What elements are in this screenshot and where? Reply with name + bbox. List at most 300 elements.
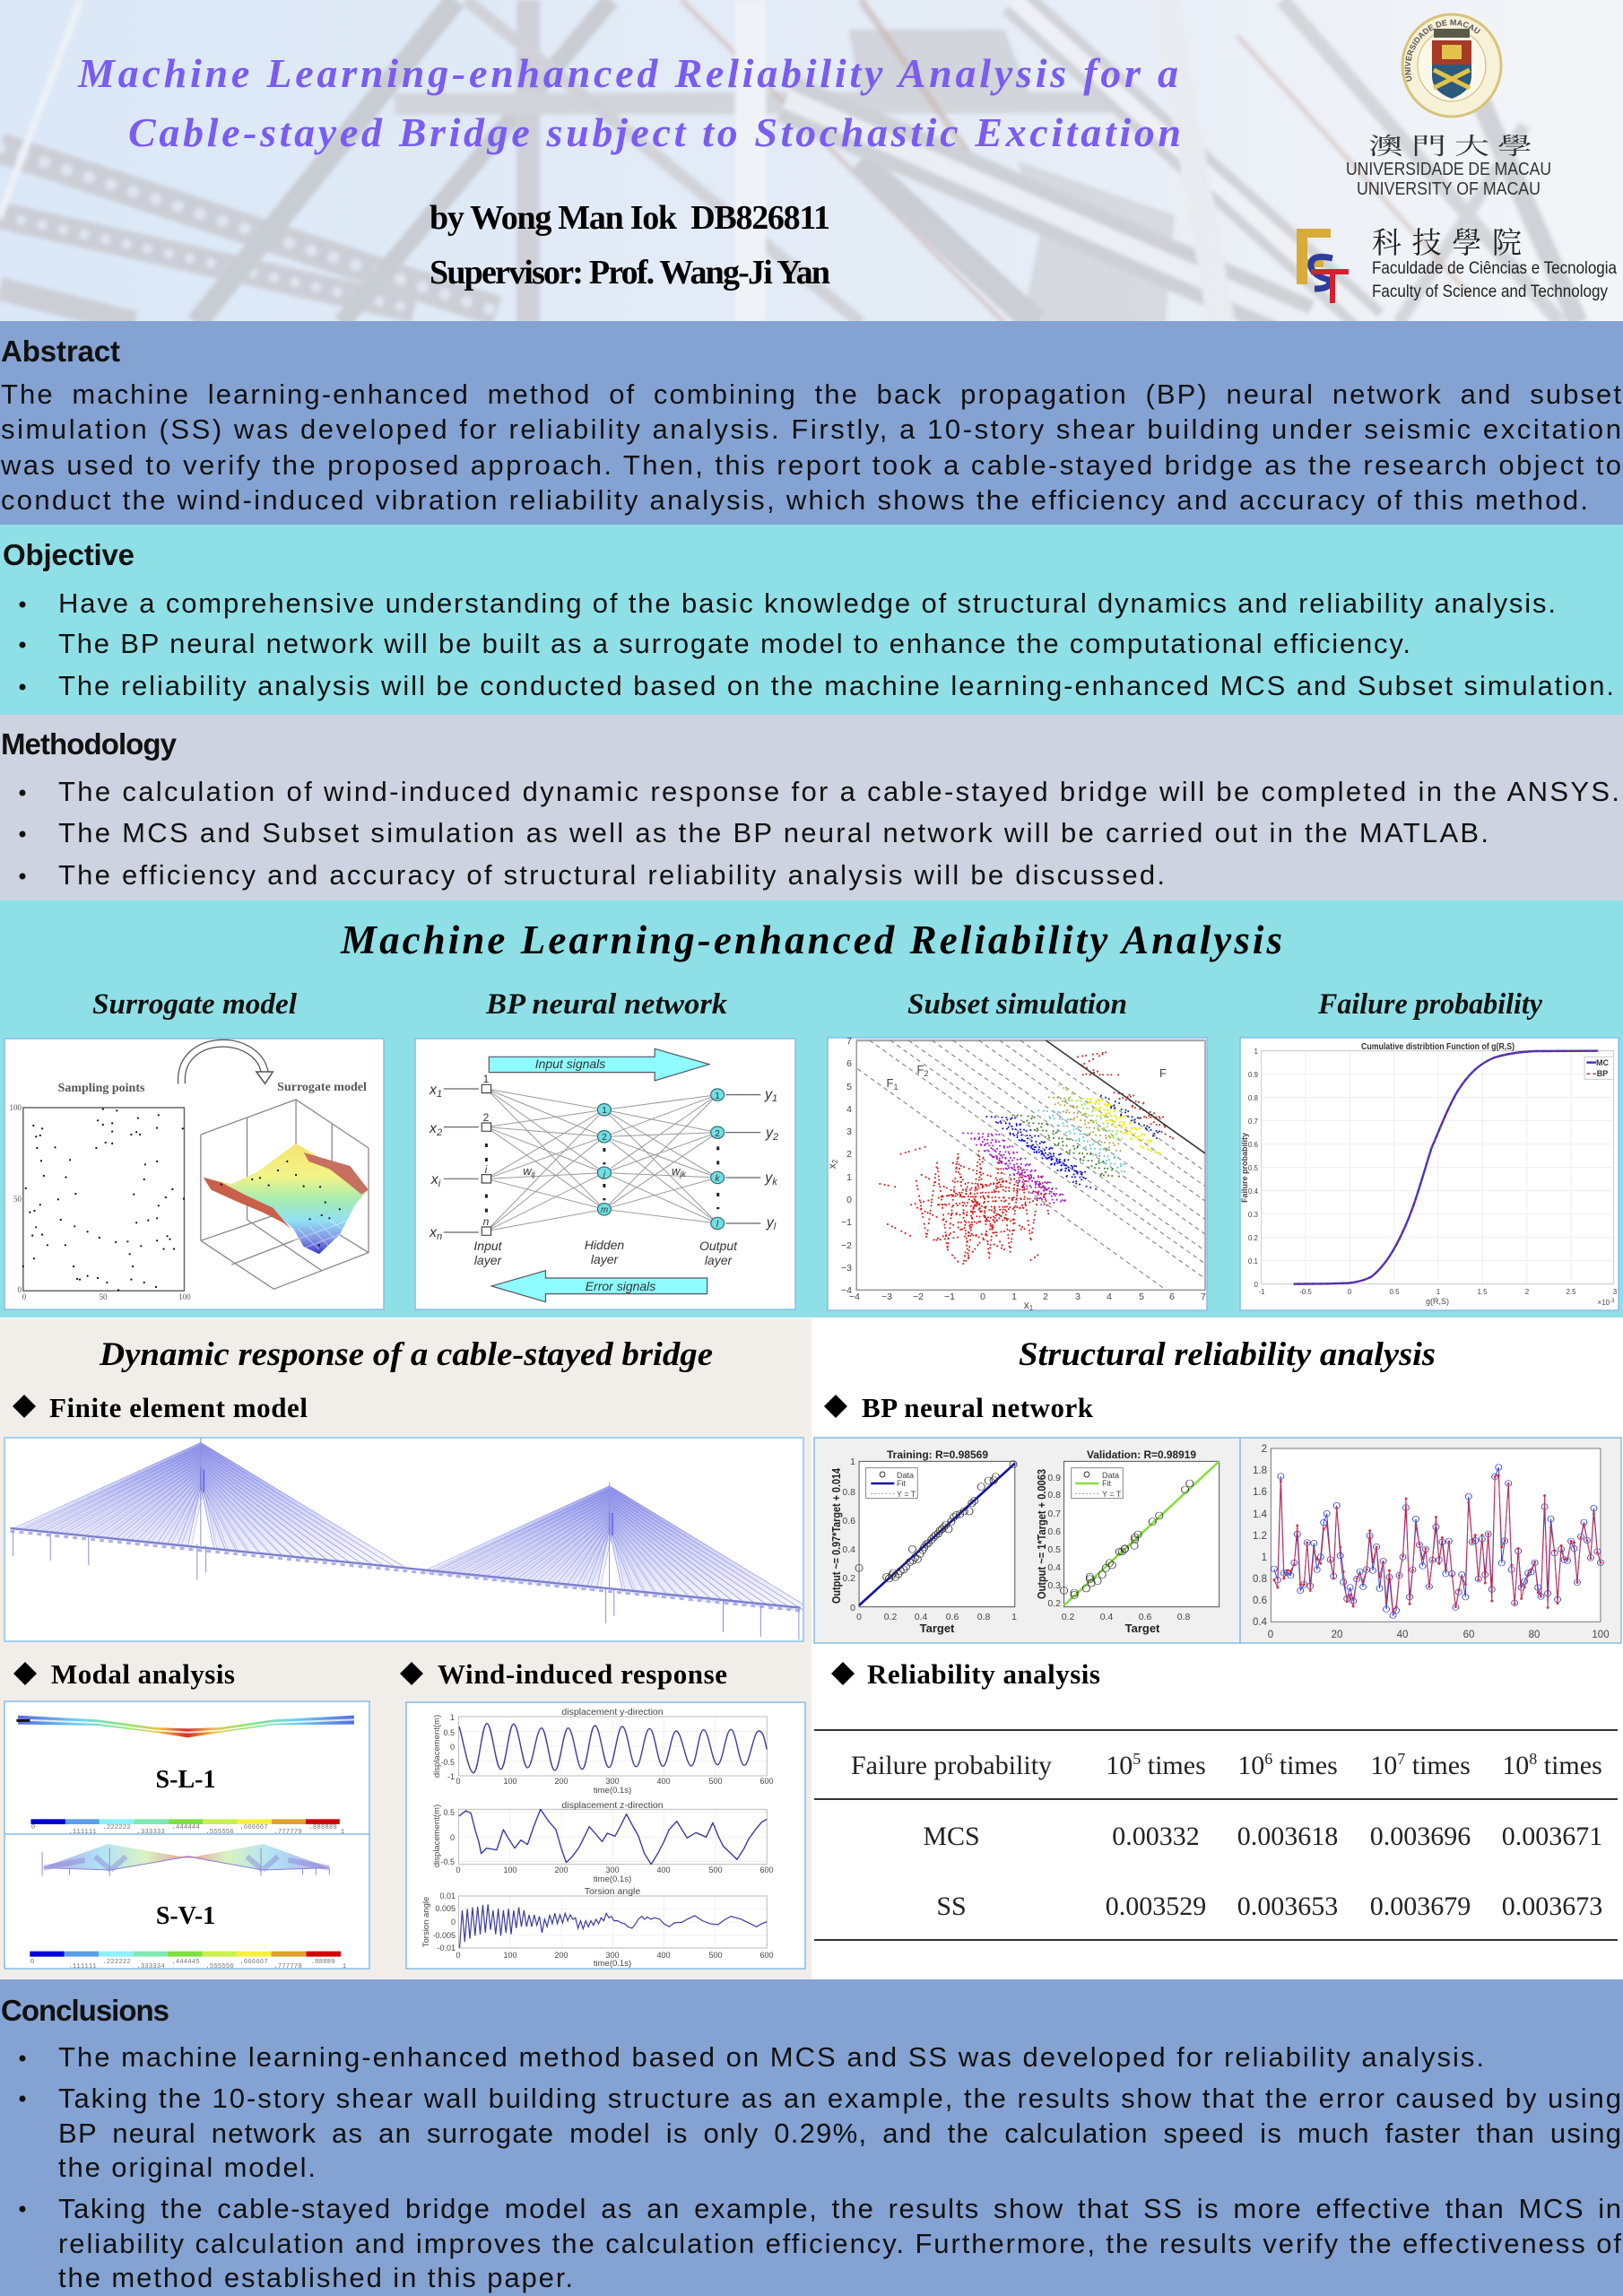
chart: failure probability CDF: Cumulative distribtion Function of g(R,S) <box>1361 1042 1515 1052</box>
chart: subset simulation scatter: F <box>1159 1066 1167 1080</box>
chart: BP regression and prediction plots: 0 <box>856 1612 862 1622</box>
university name <box>1346 134 1551 199</box>
chart: failure probability CDF: 0.3 <box>1248 1211 1259 1219</box>
chart: subset simulation scatter: 1 <box>846 1172 852 1183</box>
chart: BP regression and prediction plots: 0.2 <box>1062 1612 1074 1622</box>
chart: surrogate model illustration: 100 <box>178 1292 191 1301</box>
panel: methodology <box>0 715 1623 900</box>
chart: BP regression and prediction plots: Validation: R=0.98919 <box>1087 1448 1196 1461</box>
chart: BP regression and prediction plots: 1 <box>1262 1552 1267 1563</box>
sub-heading: BP neural network: BP neural network <box>485 988 728 1021</box>
chart: wind-induced response time histories: -0.5 <box>440 1758 455 1767</box>
chart: BP regression and prediction plots: 0 <box>1268 1630 1273 1640</box>
chart: failure probability CDF <box>1240 1038 1619 1310</box>
chart: wind-induced response time histories: 0 <box>450 1743 455 1752</box>
chart: BP neural network diagram: ij <box>532 1170 536 1178</box>
chart: subset simulation scatter: 2 <box>846 1149 852 1160</box>
chart: BP regression and prediction plots: Fit <box>1102 1479 1111 1488</box>
header background: steel structure photo <box>0 0 1623 323</box>
plot: training regression <box>859 1461 1015 1607</box>
legend <box>1584 1057 1614 1079</box>
chart: modal analysis mode shapes: .222222 <box>102 1824 131 1831</box>
chart: wind-induced response time histories: -0.01 <box>437 1944 456 1952</box>
chart: failure probability CDF: 0.8 <box>1248 1094 1259 1102</box>
mode shape S-L-1 <box>18 1716 354 1737</box>
mode shape S-V-1 <box>44 1844 329 1870</box>
chart: failure probability CDF: 2 <box>1525 1288 1530 1296</box>
chart: BP neural network diagram: 2 <box>436 1127 442 1138</box>
chart: BP regression and prediction plots: 2 <box>1262 1444 1267 1455</box>
chart: wind-induced response time histories: Torsion angle <box>585 1886 640 1897</box>
chart: failure probability CDF: 1 <box>1436 1288 1441 1296</box>
chart: surrogate model illustration: 0 <box>18 1285 22 1294</box>
table: failure probability results: 0.003529 <box>1106 1892 1206 1921</box>
chart: modal analysis mode shapes: .777779 <box>273 1963 302 1970</box>
chart: BP regression and prediction plots: 0.2 <box>842 1573 855 1584</box>
sub-heading: reliability analysis: Reliability analysis <box>867 1658 1100 1690</box>
author and supervisor: by Wong Man Iok DB826811 <box>430 199 830 237</box>
panel: structural reliability analysis <box>812 1318 1623 1979</box>
chart: BP neural network diagram: 1 <box>715 1091 720 1101</box>
colour bar S-V-1 <box>30 1952 341 1957</box>
table: failure probability results: 10 <box>1106 1751 1133 1780</box>
table: failure probability results: 7 <box>1397 1750 1405 1768</box>
chart: wind-induced response time histories: 400 <box>656 1866 671 1874</box>
chart: BP neural network diagram: n <box>483 1215 490 1228</box>
chart: wind-induced response time histories: 0.5 <box>443 1728 455 1737</box>
chart: wind-induced response time histories: 100 <box>503 1777 517 1786</box>
chart: wind-induced response time histories: -1 <box>447 1772 455 1781</box>
chart: failure probability CDF: 0.7 <box>1248 1118 1259 1126</box>
table: failure probability results: 5 <box>1133 1750 1141 1768</box>
chart: wind-induced response time histories: 300 <box>605 1777 620 1786</box>
table: failure probability results: Failure probability <box>851 1751 1052 1780</box>
chart: BP neural network diagram: Hidden <box>585 1238 624 1252</box>
table: failure probability results: 10 <box>1502 1751 1529 1780</box>
chart: BP neural network diagram: layer <box>474 1253 503 1267</box>
chart: BP regression and prediction plots: 0.3 <box>1047 1580 1061 1591</box>
chart: modal analysis mode shapes: S-L-1 <box>156 1766 215 1794</box>
chart: subset simulation scatter: 6 <box>846 1058 852 1069</box>
chart: BP neural network diagram: layer <box>591 1252 620 1266</box>
chart: subset simulation scatter: x <box>1024 1299 1029 1311</box>
legend <box>1072 1468 1123 1499</box>
objective bullets: Have a comprehensive understanding of the basic knowledge of structural dynamics and reliability analysis. <box>58 587 1556 619</box>
chart: wind-induced response time histories: 300 <box>605 1951 620 1960</box>
chart: BP neural network diagram: k <box>716 1174 721 1184</box>
chart: surrogate model illustration: 0 <box>22 1292 27 1301</box>
chart: BP regression and prediction plots: Data <box>897 1471 914 1480</box>
chart: BP neural network diagram: j <box>602 1170 606 1179</box>
table: failure probability results: 0.003696 <box>1370 1822 1471 1851</box>
panel: abstract <box>0 321 1623 525</box>
arrow: input signals <box>489 1048 709 1081</box>
table: failure probability results: times <box>1141 1751 1206 1780</box>
title: Cable-stayed Bridge subject to Stochastic Excitation <box>128 109 1181 155</box>
objective bullets: The BP neural network will be built as a surrogate model to enhance the computational efficiency. <box>58 628 1410 659</box>
chart: subset simulation scatter <box>826 1036 1207 1312</box>
chart: modal analysis mode shapes: 0 <box>30 1959 35 1966</box>
chart: subset simulation scatter: 7 <box>1201 1292 1206 1302</box>
chart: wind-induced response time histories: 600 <box>759 1951 774 1960</box>
table: failure probability results: 0.003679 <box>1370 1892 1471 1921</box>
table: failure probability results: 8 <box>1529 1750 1537 1768</box>
chart: BP neural network diagram: 1 <box>483 1073 490 1085</box>
chart: wind-induced response time histories: displacement(m) <box>432 1715 442 1778</box>
chart: failure probability CDF: 0 <box>1348 1288 1352 1296</box>
chart: BP neural network diagram: Error signals <box>586 1279 655 1293</box>
chart: subset simulation scatter: 2 <box>924 1069 928 1078</box>
chart: bridge finite element model <box>4 1438 819 1641</box>
conclusions bullets: The machine learning-enhanced method based on MCS and SS was developed for reliability analysis. <box>58 2041 1484 2073</box>
chart: modal analysis mode shapes: .444445 <box>171 1959 200 1966</box>
table: failure probability results: 0.003671 <box>1502 1822 1602 1851</box>
chart: BP regression and prediction plots: Target <box>1125 1622 1160 1635</box>
chart: BP regression and prediction plots: 1 <box>850 1457 855 1467</box>
chart: BP regression and prediction plots: 80 <box>1529 1630 1540 1640</box>
chart: modal analysis mode shapes: .555556 <box>205 1829 234 1836</box>
sub-heading: failure probability: Failure probability <box>1317 988 1542 1021</box>
chart: BP neural network diagram: y <box>766 1126 773 1141</box>
chart: BP regression and prediction plots: 0.7 <box>1047 1509 1061 1519</box>
chart: BP regression and prediction plots: 0.4 <box>1253 1617 1268 1628</box>
chart: wind-induced response time histories: displacement(m) <box>432 1805 442 1867</box>
methodology bullets <box>20 776 1619 891</box>
university name: 澳 門 大 學 <box>1368 134 1532 160</box>
heading: abstract: Abstract <box>1 335 120 368</box>
chart: wind-induced response time histories: 200 <box>554 1866 568 1874</box>
sub-heading: BP neural network: BP neural network <box>862 1392 1094 1423</box>
chart: BP regression and prediction plots: 0.2 <box>1047 1598 1061 1609</box>
chart: BP regression and prediction plots: Output ~= 1*Target + 0.0063 <box>1035 1469 1048 1599</box>
table: failure probability results: 0.003618 <box>1237 1822 1338 1851</box>
chart: wind-induced response time histories: 600 <box>759 1777 774 1786</box>
methodology bullets: The calculation of wind-induced dynamic response for a cable-stayed bridge will be completed in the ANSYS. <box>58 776 1619 807</box>
panel: conclusions <box>0 1979 1623 2296</box>
chart: wind-induced response time histories <box>406 1702 805 1969</box>
chart: BP regression and prediction plots: 1.4 <box>1253 1509 1268 1520</box>
chart: surrogate model illustration <box>4 1039 384 1309</box>
sub-heading: wind-induced response: Wind-induced response <box>438 1658 727 1690</box>
chart: BP neural network diagram: i <box>438 1178 441 1189</box>
chart: BP regression and prediction plots: 0.8 <box>1047 1490 1061 1500</box>
chart: wind-induced response time histories: 0.5 <box>443 1808 455 1817</box>
chart: subset simulation scatter: 5 <box>846 1082 852 1092</box>
chart: modal analysis mode shapes: .666667 <box>239 1959 268 1966</box>
chart: subset simulation scatter: 1 <box>1029 1304 1034 1312</box>
chart: failure probability CDF: 1.5 <box>1477 1288 1488 1296</box>
header banner <box>0 0 1623 321</box>
chart: subset simulation scatter: 3 <box>846 1126 852 1137</box>
chart: BP neural network diagram: w <box>672 1164 680 1178</box>
chart: BP regression and prediction plots: 0.6 <box>842 1516 855 1526</box>
chart: BP neural network diagram: l <box>716 1220 719 1230</box>
chart: subset simulation scatter: 0 <box>980 1292 985 1302</box>
table: failure probability results: SS <box>936 1892 967 1921</box>
chart: wind-induced response time histories: time(0.1s) <box>594 1874 631 1884</box>
title: Machine Learning-enhanced Reliability Analysis for a <box>77 50 1178 96</box>
chart: wind-induced response time histories: 0 <box>456 1777 461 1786</box>
conclusions bullets: reliability calculation and improves the calculation efficiency. Furthermore, the results verify the effectiveness of <box>58 2228 1621 2259</box>
chart: subset simulation scatter: −3 <box>881 1292 892 1302</box>
chart: BP regression and prediction plots: 0.9 <box>1047 1473 1061 1483</box>
conclusions bullets: BP neural network as an surrogate model is only 0.29%, and the calculation speed is much faster than using <box>58 2118 1621 2149</box>
chart: wind-induced response time histories: displacement y-direction <box>561 1707 664 1718</box>
table: failure probability results: 0.003673 <box>1502 1892 1602 1921</box>
chart: failure probability CDF: 1 <box>1254 1048 1259 1056</box>
chart: BP neural network diagram: x <box>431 1172 438 1187</box>
chart: failure probability CDF: 0 <box>1254 1281 1259 1289</box>
chart: wind-induced response time histories: 300 <box>605 1866 620 1874</box>
chart: BP regression and prediction plots: 0.6 <box>1047 1526 1061 1537</box>
chart: wind-induced response time histories: -0.5 <box>440 1857 455 1866</box>
chart: wind-induced response time histories: 0 <box>450 1833 455 1842</box>
chart: BP regression and prediction plots: 60 <box>1463 1630 1474 1640</box>
chart: wind-induced response time histories: 0 <box>451 1918 456 1926</box>
chart: BP neural network diagram: 1 <box>602 1106 607 1116</box>
chart: BP regression and prediction plots: 0.8 <box>1253 1574 1267 1585</box>
section heading: Machine Learning-enhanced Reliability Analysis <box>340 918 1282 962</box>
chart: failure probability CDF: 0.9 <box>1248 1071 1259 1079</box>
chart: BP neural network diagram: n <box>437 1231 442 1242</box>
chart: BP neural network diagram: 2 <box>715 1129 720 1139</box>
abstract text: simulation (SS) was developed for reliability analysis. Firstly, a 10-story shear building under seismic excitation <box>1 413 1621 445</box>
chart: subset simulation scatter: x <box>826 1163 838 1169</box>
chart: BP regression and prediction plots <box>814 1438 1621 1643</box>
chart: wind-induced response time histories: 100 <box>503 1951 517 1960</box>
chart: modal analysis mode shapes: .88889 <box>310 1959 335 1966</box>
title <box>77 50 1181 155</box>
chart: wind-induced response time histories: 1 <box>450 1713 455 1722</box>
author and supervisor <box>430 199 830 291</box>
table: failure probability results: times <box>1272 1751 1338 1780</box>
chart: BP neural network diagram: y <box>765 1170 772 1186</box>
chart: wind-induced response time histories: 500 <box>708 1951 723 1960</box>
chart: BP regression and prediction plots: 0.4 <box>1047 1562 1061 1573</box>
chart: BP regression and prediction plots: 0.2 <box>884 1612 897 1622</box>
chart: surrogate model illustration: 50 <box>13 1195 22 1204</box>
chart: BP neural network diagram: 2 <box>483 1111 490 1124</box>
chart: BP regression and prediction plots: 0.4 <box>915 1612 927 1622</box>
chart: subset simulation scatter: 5 <box>1139 1292 1144 1302</box>
abstract text: The machine learning-enhanced method of combining the back propagation (BP) neural network and subset <box>1 378 1621 410</box>
icon: university seal: UNIVERSIDADE DE MACAU <box>1404 20 1480 82</box>
chart: subset simulation scatter: 4 <box>1107 1292 1112 1302</box>
chart: modal analysis mode shapes: .333334 <box>136 1963 165 1970</box>
chart: failure probability CDF: 0.2 <box>1248 1234 1259 1242</box>
chart: BP regression and prediction plots: 1 <box>1011 1612 1017 1622</box>
colour bar S-L-1 <box>30 1819 340 1824</box>
chart: wind-induced response time histories: displacement z-direction <box>561 1800 664 1811</box>
chart: modal analysis mode shapes: .444444 <box>171 1824 200 1831</box>
chart: BP regression and prediction plots: Target <box>920 1622 955 1635</box>
sub-heading: modal analysis: Modal analysis <box>51 1658 235 1690</box>
chart: wind-induced response time histories: 500 <box>708 1866 723 1874</box>
chart: BP regression and prediction plots: 0.5 <box>1047 1544 1061 1555</box>
conclusions bullets: Taking the 10-story shear wall building structure as an example, the results show that the error caused by using <box>58 2083 1621 2114</box>
chart: BP neural network diagram: x <box>430 1121 437 1136</box>
methodology bullets: The efficiency and accuracy of structural reliability analysis will be discussed. <box>58 859 1165 891</box>
chart: BP neural network diagram <box>415 1039 795 1309</box>
chart: BP regression and prediction plots: 0.8 <box>977 1612 990 1622</box>
chart: modal analysis mode shapes: .888889 <box>308 1824 337 1831</box>
chart: subset simulation scatter: 2 <box>1043 1292 1048 1302</box>
chart: failure probability CDF: 0.6 <box>1248 1141 1259 1149</box>
chart: surrogate model illustration: Surrogate model <box>277 1081 367 1094</box>
chart: modal analysis mode shapes: 1 <box>343 1963 347 1970</box>
chart: subset simulation scatter: 1 <box>893 1083 898 1091</box>
chart: subset simulation scatter: 1 <box>1011 1292 1017 1302</box>
chart: BP neural network diagram: y <box>767 1215 774 1231</box>
heading: conclusions: Conclusions <box>1 1994 169 2027</box>
chart: subset simulation scatter: 4 <box>846 1104 852 1115</box>
chart: BP neural network diagram: i <box>485 1163 488 1176</box>
chart: BP neural network diagram: 1 <box>437 1089 442 1100</box>
chart: subset simulation scatter: 3 <box>1075 1292 1081 1302</box>
table: failure probability results: 0.003653 <box>1237 1892 1338 1921</box>
icon: university seal <box>1401 13 1503 118</box>
chart: wind-induced response time histories: 200 <box>554 1777 568 1786</box>
chart: failure probability CDF: 0.4 <box>1248 1187 1259 1196</box>
chart: BP regression and prediction plots: 0.8 <box>842 1487 855 1498</box>
chart: BP regression and prediction plots: Fit <box>897 1479 906 1488</box>
chart: BP neural network diagram: 2 <box>772 1132 778 1143</box>
table: failure probability results: 10 <box>1237 1751 1264 1780</box>
chart: BP neural network diagram: jk <box>679 1170 686 1178</box>
chart: subset simulation scatter: F <box>917 1063 924 1076</box>
heading: dynamic response: Dynamic response of a cable-stayed bridge <box>99 1336 713 1373</box>
conclusions bullets: the original model. <box>58 2152 316 2183</box>
chart: wind-induced response time histories: 200 <box>554 1951 568 1960</box>
table: failure probability results: 6 <box>1264 1750 1272 1768</box>
chart: modal analysis mode shapes: S-V-1 <box>156 1902 215 1930</box>
chart: modal analysis mode shapes: .111111 <box>68 1963 97 1970</box>
arrow: error signals <box>491 1271 707 1302</box>
chart: BP neural network diagram: y <box>765 1087 772 1102</box>
sub-heading: finite element model: Finite element model <box>49 1392 308 1423</box>
methodology bullets: The MCS and Subset simulation as well as the BP neural network will be carried out in the MATLAB. <box>58 817 1488 848</box>
abstract text: was used to verify the proposed approach. Then, this report took a cable-stayed bridge as the research object to <box>0 449 1621 481</box>
chart: modal analysis mode shapes <box>4 1701 369 1970</box>
chart: failure probability CDF: 2.5 <box>1566 1288 1576 1296</box>
chart: BP regression and prediction plots: Y = T <box>897 1490 916 1499</box>
chart: BP regression and prediction plots: 0.6 <box>946 1612 959 1622</box>
chart: BP regression and prediction plots: 0 <box>850 1603 855 1613</box>
chart: wind-induced response time histories: 0 <box>456 1951 461 1960</box>
chart: failure probability CDF: Failure probability <box>1240 1133 1249 1203</box>
university name: UNIVERSITY OF MACAU <box>1357 179 1541 199</box>
chart: failure probability CDF: 0.5 <box>1248 1164 1259 1172</box>
heading: objective: Objective <box>3 538 135 571</box>
chart: BP regression and prediction plots: 0.6 <box>1253 1596 1267 1606</box>
abstract text: conduct the wind-induced vibration reliability analysis, which shows the efficiency and accuracy of this method. <box>1 484 1588 516</box>
chart: BP regression and prediction plots: Training: R=0.98569 <box>887 1448 988 1461</box>
chart: BP regression and prediction plots: 0.6 <box>1139 1612 1151 1622</box>
chart: BP neural network diagram: x <box>430 1225 437 1240</box>
chart: BP regression and prediction plots: 0.4 <box>1100 1612 1113 1622</box>
chart: wind-induced response time histories: Torsion angle <box>421 1897 431 1947</box>
conclusions bullets: Taking the cable-stayed bridge model as an example, the results show that SS is more effective than MCS in <box>58 2193 1621 2224</box>
chart: BP regression and prediction plots: 20 <box>1332 1630 1342 1640</box>
chart: BP regression and prediction plots: 1.8 <box>1253 1465 1267 1476</box>
icon: FST logo <box>1297 229 1349 303</box>
chart: failure probability CDF: g(R,S) <box>1426 1297 1449 1306</box>
legend <box>866 1468 917 1499</box>
chart: subset simulation scatter: −1 <box>841 1217 852 1228</box>
chart: modal analysis mode shapes: .111111 <box>68 1829 97 1836</box>
chart: wind-induced response time histories: 400 <box>656 1777 671 1786</box>
chart: BP neural network diagram: m <box>601 1205 608 1215</box>
panel: dynamic response of a cable-stayed bridge <box>0 1318 819 1979</box>
chart: wind-induced response time histories: 0.01 <box>439 1892 456 1900</box>
university name: UNIVERSIDADE DE MACAU <box>1346 160 1551 179</box>
chart: failure probability CDF: -0.5 <box>1299 1288 1312 1296</box>
chart: subset simulation scatter: F <box>887 1076 893 1090</box>
faculty name: 科技學院 <box>1372 227 1522 260</box>
faculty name <box>1372 227 1617 301</box>
author and supervisor: Supervisor: Prof. Wang-Ji Yan <box>430 254 830 291</box>
chart: BP regression and prediction plots: Data <box>1102 1471 1119 1480</box>
chart: wind-induced response time histories: time(0.1s) <box>594 1959 631 1969</box>
chart: modal analysis mode shapes: .222222 <box>102 1959 131 1966</box>
conclusions bullets <box>20 2041 1621 2293</box>
sub-heading: subset simulation: Subset simulation <box>907 988 1127 1021</box>
chart: BP neural network diagram: k <box>772 1177 777 1187</box>
chart: surrogate model illustration: Sampling points <box>58 1082 145 1095</box>
heading: structural reliability analysis: Structural reliability analysis <box>1019 1336 1436 1373</box>
chart: BP regression and prediction plots: 1.6 <box>1253 1487 1267 1498</box>
chart: wind-induced response time histories: -0.005 <box>432 1931 456 1940</box>
chart: modal analysis mode shapes: .333333 <box>136 1829 165 1836</box>
chart: BP neural network diagram: Input <box>473 1239 503 1253</box>
chart: wind-induced response time histories: time(0.1s) <box>594 1786 631 1796</box>
chart: BP regression and prediction plots: 0.4 <box>842 1544 855 1555</box>
plot: validation regression <box>1064 1461 1219 1607</box>
chart: subset simulation scatter: 6 <box>1169 1292 1175 1302</box>
chart: BP regression and prediction plots: Output ~= 0.97*Target + 0.014 <box>829 1467 843 1604</box>
chart: BP neural network diagram: Input signals <box>535 1057 605 1071</box>
chart: subset simulation scatter: −2 <box>841 1240 852 1251</box>
chart: subset simulation scatter: −3 <box>841 1263 852 1274</box>
chart: surrogate model illustration: 50 <box>99 1292 108 1301</box>
chart: BP neural network diagram: 2 <box>602 1133 607 1143</box>
chart: subset simulation scatter: 0 <box>846 1195 852 1205</box>
plot: prediction time series <box>1271 1448 1601 1622</box>
chart: BP neural network diagram: w <box>523 1164 532 1178</box>
panel: machine learning-enhanced reliability analysis <box>0 900 1623 1318</box>
heading: methodology: Methodology <box>1 727 178 761</box>
chart: wind-induced response time histories: 0 <box>456 1866 461 1874</box>
chart: failure probability CDF: -1 <box>1258 1288 1265 1296</box>
chart: BP regression and prediction plots: 0.8 <box>1177 1612 1190 1622</box>
chart: BP neural network diagram: layer <box>705 1253 733 1267</box>
chart: subset simulation scatter: −4 <box>849 1292 860 1302</box>
chart: subset simulation scatter: 2 <box>831 1159 839 1163</box>
table: failure probability results: 0.00332 <box>1112 1822 1200 1851</box>
chart: modal analysis mode shapes: .666667 <box>239 1824 268 1831</box>
chart: BP neural network diagram: l <box>774 1222 777 1232</box>
chart: failure probability CDF: MC <box>1596 1058 1609 1067</box>
chart: wind-induced response time histories: 0.005 <box>435 1904 456 1913</box>
chart: failure probability CDF: BP <box>1597 1069 1608 1078</box>
chart: failure probability CDF: -3 <box>1610 1299 1615 1304</box>
chart: subset simulation scatter: −1 <box>944 1292 955 1302</box>
chart: wind-induced response time histories: 100 <box>503 1866 517 1874</box>
chart: BP regression and prediction plots: 40 <box>1397 1630 1408 1640</box>
chart: BP regression and prediction plots: 1.2 <box>1253 1531 1267 1542</box>
arrow: curved arrow <box>181 1043 265 1083</box>
chart: failure probability CDF: 0.1 <box>1248 1257 1259 1265</box>
